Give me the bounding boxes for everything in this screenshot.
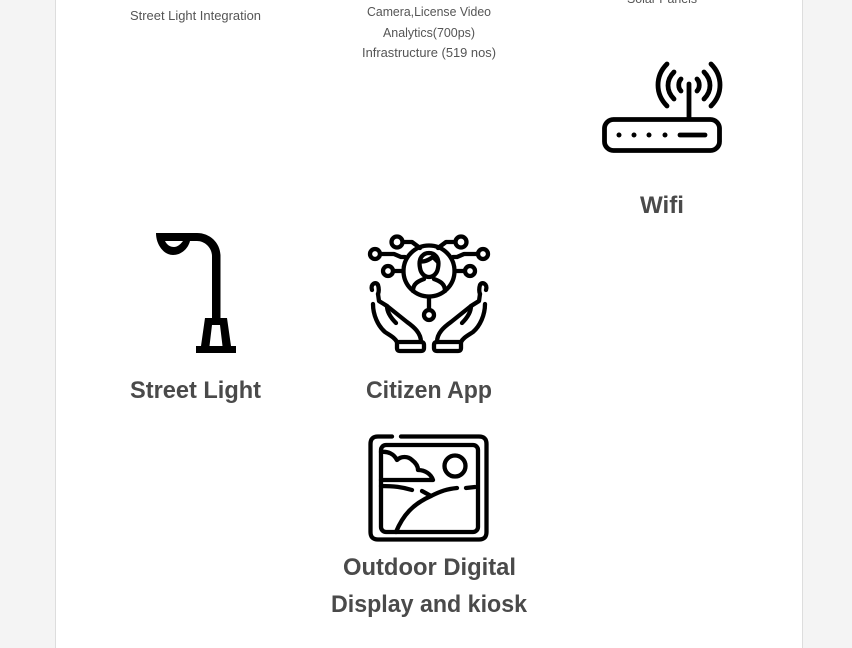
heading: street light: Street Light bbox=[130, 377, 261, 404]
text block: camera and video analytics caption: Infrastructure (519 nos) bbox=[362, 46, 496, 60]
icon: citizen app, hands holding connected person bbox=[370, 236, 488, 351]
text: street light integration caption: Street Light Integration bbox=[130, 9, 261, 23]
text block: camera and video analytics caption: Camera,License Video bbox=[367, 5, 491, 19]
heading: outdoor digital display and kiosk: Outdoor Digital bbox=[343, 554, 516, 581]
text block: camera and video analytics caption bbox=[362, 5, 496, 60]
heading: outdoor digital display and kiosk: Display and kiosk bbox=[331, 591, 528, 618]
heading: outdoor digital display and kiosk bbox=[331, 554, 528, 618]
icon: wifi router bbox=[604, 64, 720, 150]
heading: citizen app: Citizen App bbox=[366, 377, 492, 404]
text block: camera and video analytics caption: Analytics(700ps) bbox=[383, 26, 475, 40]
icon: outdoor digital display with landscape bbox=[370, 436, 486, 540]
heading: wifi: Wifi bbox=[640, 192, 684, 219]
icon: street light bbox=[156, 233, 236, 353]
